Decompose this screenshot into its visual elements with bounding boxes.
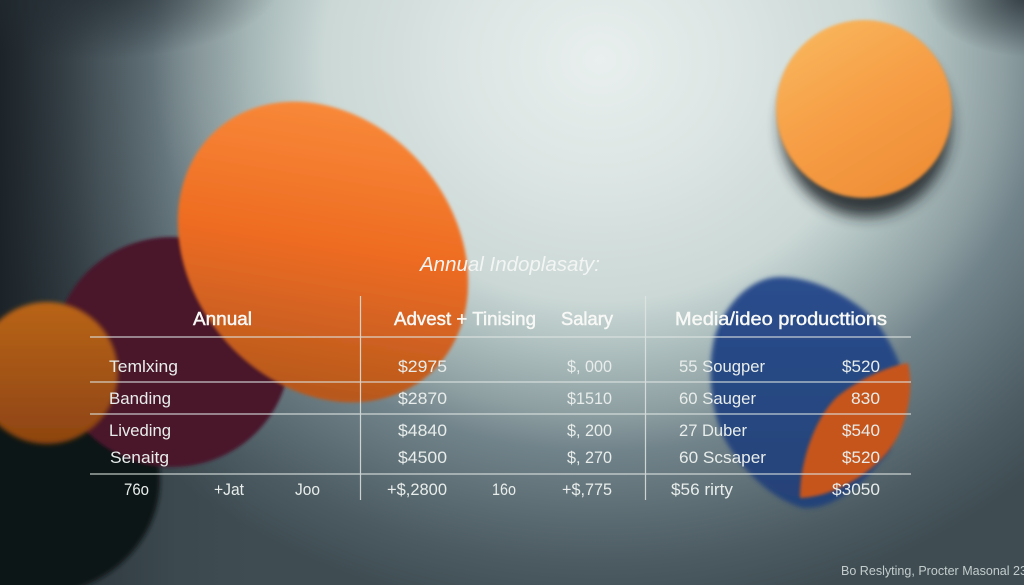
row: Senaitg: $520 — [842, 448, 880, 467]
shadow: top right circle — [781, 35, 951, 217]
row: totals: $56 rirty — [671, 480, 733, 499]
row: Temlxing: $, 000 — [567, 357, 612, 376]
top left dark vignette — [0, 0, 280, 60]
row: Liveding: $, 200 — [567, 421, 612, 440]
row: Senaitg: $, 270 — [567, 448, 612, 467]
row: Temlxing: Temlxing — [109, 357, 178, 376]
row: Banding — [109, 389, 880, 408]
row: Senaitg: Senaitg — [110, 448, 169, 467]
row: Temlxing: 55 Sougper — [679, 357, 765, 376]
row: Temlxing: $2975 — [398, 357, 447, 376]
row: Banding: $2870 — [398, 389, 447, 408]
circle: small orange left — [0, 302, 118, 444]
row: Banding: Banding — [109, 389, 171, 408]
row: totals: +$,775 — [562, 480, 612, 499]
row: totals: $3050 — [832, 480, 880, 499]
row: Banding: 830 — [851, 389, 880, 408]
table grid lines — [90, 296, 911, 500]
table header row: Advest + Tinising — [394, 309, 536, 329]
table header row — [193, 309, 887, 329]
row: totals: Joo — [295, 480, 320, 499]
row: Banding: $1510 — [567, 389, 612, 408]
circle: top right orange — [776, 20, 952, 198]
table header row: Annual — [193, 309, 252, 329]
title: Annual Indoplasaty: — [419, 254, 600, 276]
row: Liveding — [109, 421, 880, 440]
row: totals: +$,2800 — [387, 480, 447, 499]
row: Temlxing: $520 — [842, 357, 880, 376]
row: Senaitg: 60 Scsaper — [679, 448, 766, 467]
row: Banding: 60 Sauger — [679, 389, 756, 408]
row: Liveding: $4840 — [398, 421, 447, 440]
row: Senaitg — [110, 448, 880, 467]
circle: black bottom left — [0, 365, 160, 585]
row: Liveding: Liveding — [109, 421, 171, 440]
row: totals: 76o — [124, 480, 149, 499]
row: Senaitg: $4500 — [398, 448, 447, 467]
table header row: Salary — [561, 309, 613, 329]
top right dark vignette — [925, 0, 1024, 57]
ellipse: large orange — [118, 43, 528, 461]
circle: maroon — [54, 237, 290, 467]
row: Liveding: $540 — [842, 421, 880, 440]
shape: orange leaf — [800, 363, 910, 498]
left dark vignette — [0, 0, 250, 585]
row: Liveding: 27 Duber — [679, 421, 747, 440]
row: totals: +Jat — [214, 480, 244, 499]
row: totals — [124, 480, 880, 499]
table header row: Media/ideo producttions — [675, 309, 887, 329]
row: Temlxing — [109, 357, 880, 376]
shape: blue blob — [711, 277, 900, 508]
row: totals: 16o — [492, 480, 516, 499]
table — [90, 296, 911, 500]
